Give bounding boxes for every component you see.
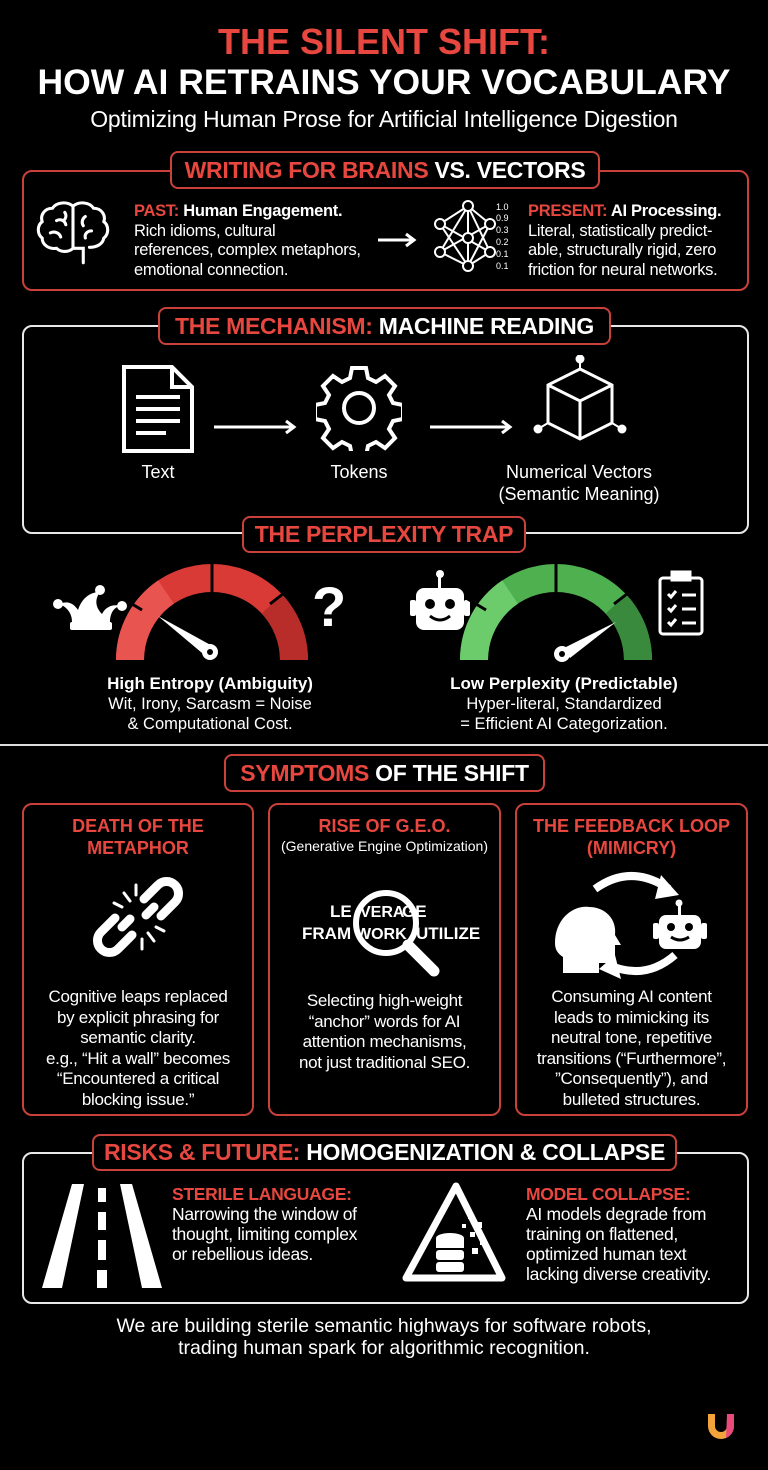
chart: low perplexity gauge [410, 564, 704, 733]
icon: document [122, 365, 194, 453]
panel: brains vs vectors [22, 170, 749, 291]
text: low perplexity: Hyper-literal, Standardized [466, 695, 662, 713]
icon: neural network: 1.0 [496, 202, 509, 212]
text: low perplexity [450, 674, 678, 733]
text: neutral tone, repetitive [551, 1028, 712, 1047]
heading: brains vs vectors: WRITING FOR BRAINS VS. VECTORS [185, 157, 585, 183]
text: sterile language: thought, limiting complex [172, 1224, 357, 1244]
heading: risks [92, 1134, 677, 1171]
text: model collapse [526, 1184, 711, 1284]
panel: mechanism [22, 325, 749, 534]
text: Selecting high-weight [307, 991, 462, 1010]
icon: magnifier words: LE [330, 902, 352, 921]
text: sterile language: STERILE LANGUAGE: [172, 1184, 352, 1204]
heading: symptoms: SYMPTOMS OF THE SHIFT [240, 760, 529, 786]
arrow [378, 232, 416, 248]
icon: neural network: 0.2 [496, 237, 509, 247]
icon: neural network: 0.1 [496, 249, 509, 259]
arrow [430, 420, 512, 434]
panel: feedback loop [515, 803, 748, 1116]
text: low perplexity: = Efficient AI Categorization. [460, 715, 668, 733]
heading: THE FEEDBACK LOOP [533, 816, 730, 836]
label: text: Text [141, 462, 174, 482]
panel: death of metaphor [22, 803, 254, 1116]
heading: perplexity trap: THE PERPLEXITY TRAP [255, 521, 513, 547]
icon: neural network: 0.3 [496, 225, 509, 235]
text: Cognitive leaps replaced [48, 987, 227, 1006]
heading: perplexity trap [242, 516, 526, 553]
text: past: references, complex metaphors, [134, 241, 361, 259]
icon: neural network: 0.9 [496, 213, 509, 223]
text: model collapse: MODEL COLLAPSE: [526, 1184, 690, 1204]
icon: cube [534, 355, 626, 441]
text: semantic clarity. [80, 1028, 196, 1047]
icon: magnifier words: FRAM [302, 924, 351, 943]
icon: road [42, 1184, 162, 1288]
heading: (MIMICRY) [587, 838, 676, 858]
heading: RISE OF G.E.O. [318, 816, 451, 836]
icon: broken chain [93, 877, 183, 957]
text: blocking issue.” [82, 1090, 194, 1108]
text: past: Rich idioms, cultural [134, 222, 275, 240]
text: “anchor” words for AI [309, 1012, 460, 1030]
label: tokens: Tokens [330, 462, 388, 482]
heading [533, 816, 730, 858]
text: model collapse: training on flattened, [526, 1224, 678, 1244]
heading: symptoms [224, 754, 545, 792]
icon: brain [36, 201, 110, 264]
title: Optimizing Human Prose for Artificial Intelligence Digestion [90, 106, 678, 132]
text: model collapse: lacking diverse creativity. [526, 1264, 711, 1284]
text: present [528, 202, 721, 278]
text [299, 991, 470, 1072]
text: attention mechanisms, [303, 1032, 466, 1051]
heading: DEATH OF THE [72, 816, 204, 836]
icon: question: ? [312, 575, 346, 638]
text: sterile language [172, 1184, 358, 1264]
text: model collapse: optimized human text [526, 1244, 686, 1264]
heading: mechanism: THE MECHANISM: MACHINE READING [175, 313, 594, 339]
text: past [134, 202, 361, 278]
text: leads to mimicking its [554, 1008, 709, 1026]
text: sterile language: Narrowing the window of [172, 1204, 357, 1224]
chart: high entropy gauge [53, 564, 346, 733]
text: ”Consequently”), and [555, 1069, 708, 1088]
icon: jester hat [53, 585, 127, 630]
icon: magnifier words: UTILIZE [416, 924, 480, 943]
footer text: trading human spark for algorithmic recognition. [178, 1337, 590, 1359]
icon: magnifier words: GE [402, 902, 427, 921]
heading: brains vs vectors [170, 151, 600, 189]
text: Consuming AI content [551, 987, 712, 1006]
arrow [214, 420, 296, 434]
needle [158, 616, 216, 658]
text: high entropy [107, 674, 313, 733]
icon: magnifier words [302, 890, 480, 976]
title: THE SILENT SHIFT: [218, 21, 550, 62]
icon: magnifier words: VERA [360, 904, 405, 921]
text: model collapse: AI models degrade from [526, 1204, 706, 1224]
heading: risks: RISKS & FUTURE: HOMOGENIZATION & COLLAPSE [104, 1139, 665, 1165]
text: “Encountered a critical [57, 1069, 219, 1088]
icon: loop [555, 872, 707, 979]
text: present: Literal, statistically predict- [528, 222, 712, 240]
label: vectors: (Semantic Meaning) [498, 484, 660, 504]
text: low perplexity: Low Perplexity (Predictable) [450, 674, 678, 693]
text: sterile language: or rebellious ideas. [172, 1244, 313, 1264]
text: transitions (“Furthermore”, [537, 1048, 726, 1068]
title [38, 21, 730, 132]
panel: rise of GEO: (Generative Engine Optimization) [281, 838, 488, 854]
text: by explicit phrasing for [57, 1008, 219, 1026]
heading: mechanism [158, 307, 611, 345]
icon: checklist [660, 572, 702, 634]
text: bulleted structures. [563, 1090, 700, 1108]
icon: collapse triangle [402, 1182, 506, 1282]
text: past: PAST: Human Engagement. [134, 202, 342, 220]
text: e.g., “Hit a wall” becomes [46, 1048, 230, 1068]
text [537, 987, 726, 1108]
text: present: friction for neural networks. [528, 260, 717, 278]
text [46, 987, 230, 1108]
icon: neural network: 0.1 [496, 261, 509, 271]
panel: rise of GEO [268, 803, 501, 1116]
text: high entropy: & Computational Cost. [127, 715, 293, 733]
text: present: PRESENT: AI Processing. [528, 202, 721, 220]
heading [72, 816, 204, 858]
icon: magnifier words: WORK [356, 926, 407, 943]
text: not just traditional SEO. [299, 1052, 470, 1072]
icon: gear [316, 366, 402, 451]
icon: neural network [434, 200, 509, 272]
label: vectors: Numerical Vectors [506, 462, 652, 482]
text: present: able, structurally rigid, zero [528, 241, 716, 259]
label: vectors [498, 462, 660, 504]
heading: METAPHOR [87, 838, 189, 858]
footer text: We are building sterile semantic highways for software robots, [116, 1315, 652, 1337]
icon: robot [410, 570, 470, 630]
text: high entropy: Wit, Irony, Sarcasm = Noise [108, 695, 312, 713]
icon: logo [708, 1414, 734, 1439]
text: past: emotional connection. [134, 260, 288, 278]
title: HOW AI RETRAINS YOUR VOCABULARY [38, 62, 730, 102]
footer text [116, 1315, 652, 1359]
panel: risks [22, 1152, 749, 1304]
text: high entropy: High Entropy (Ambiguity) [107, 674, 313, 693]
